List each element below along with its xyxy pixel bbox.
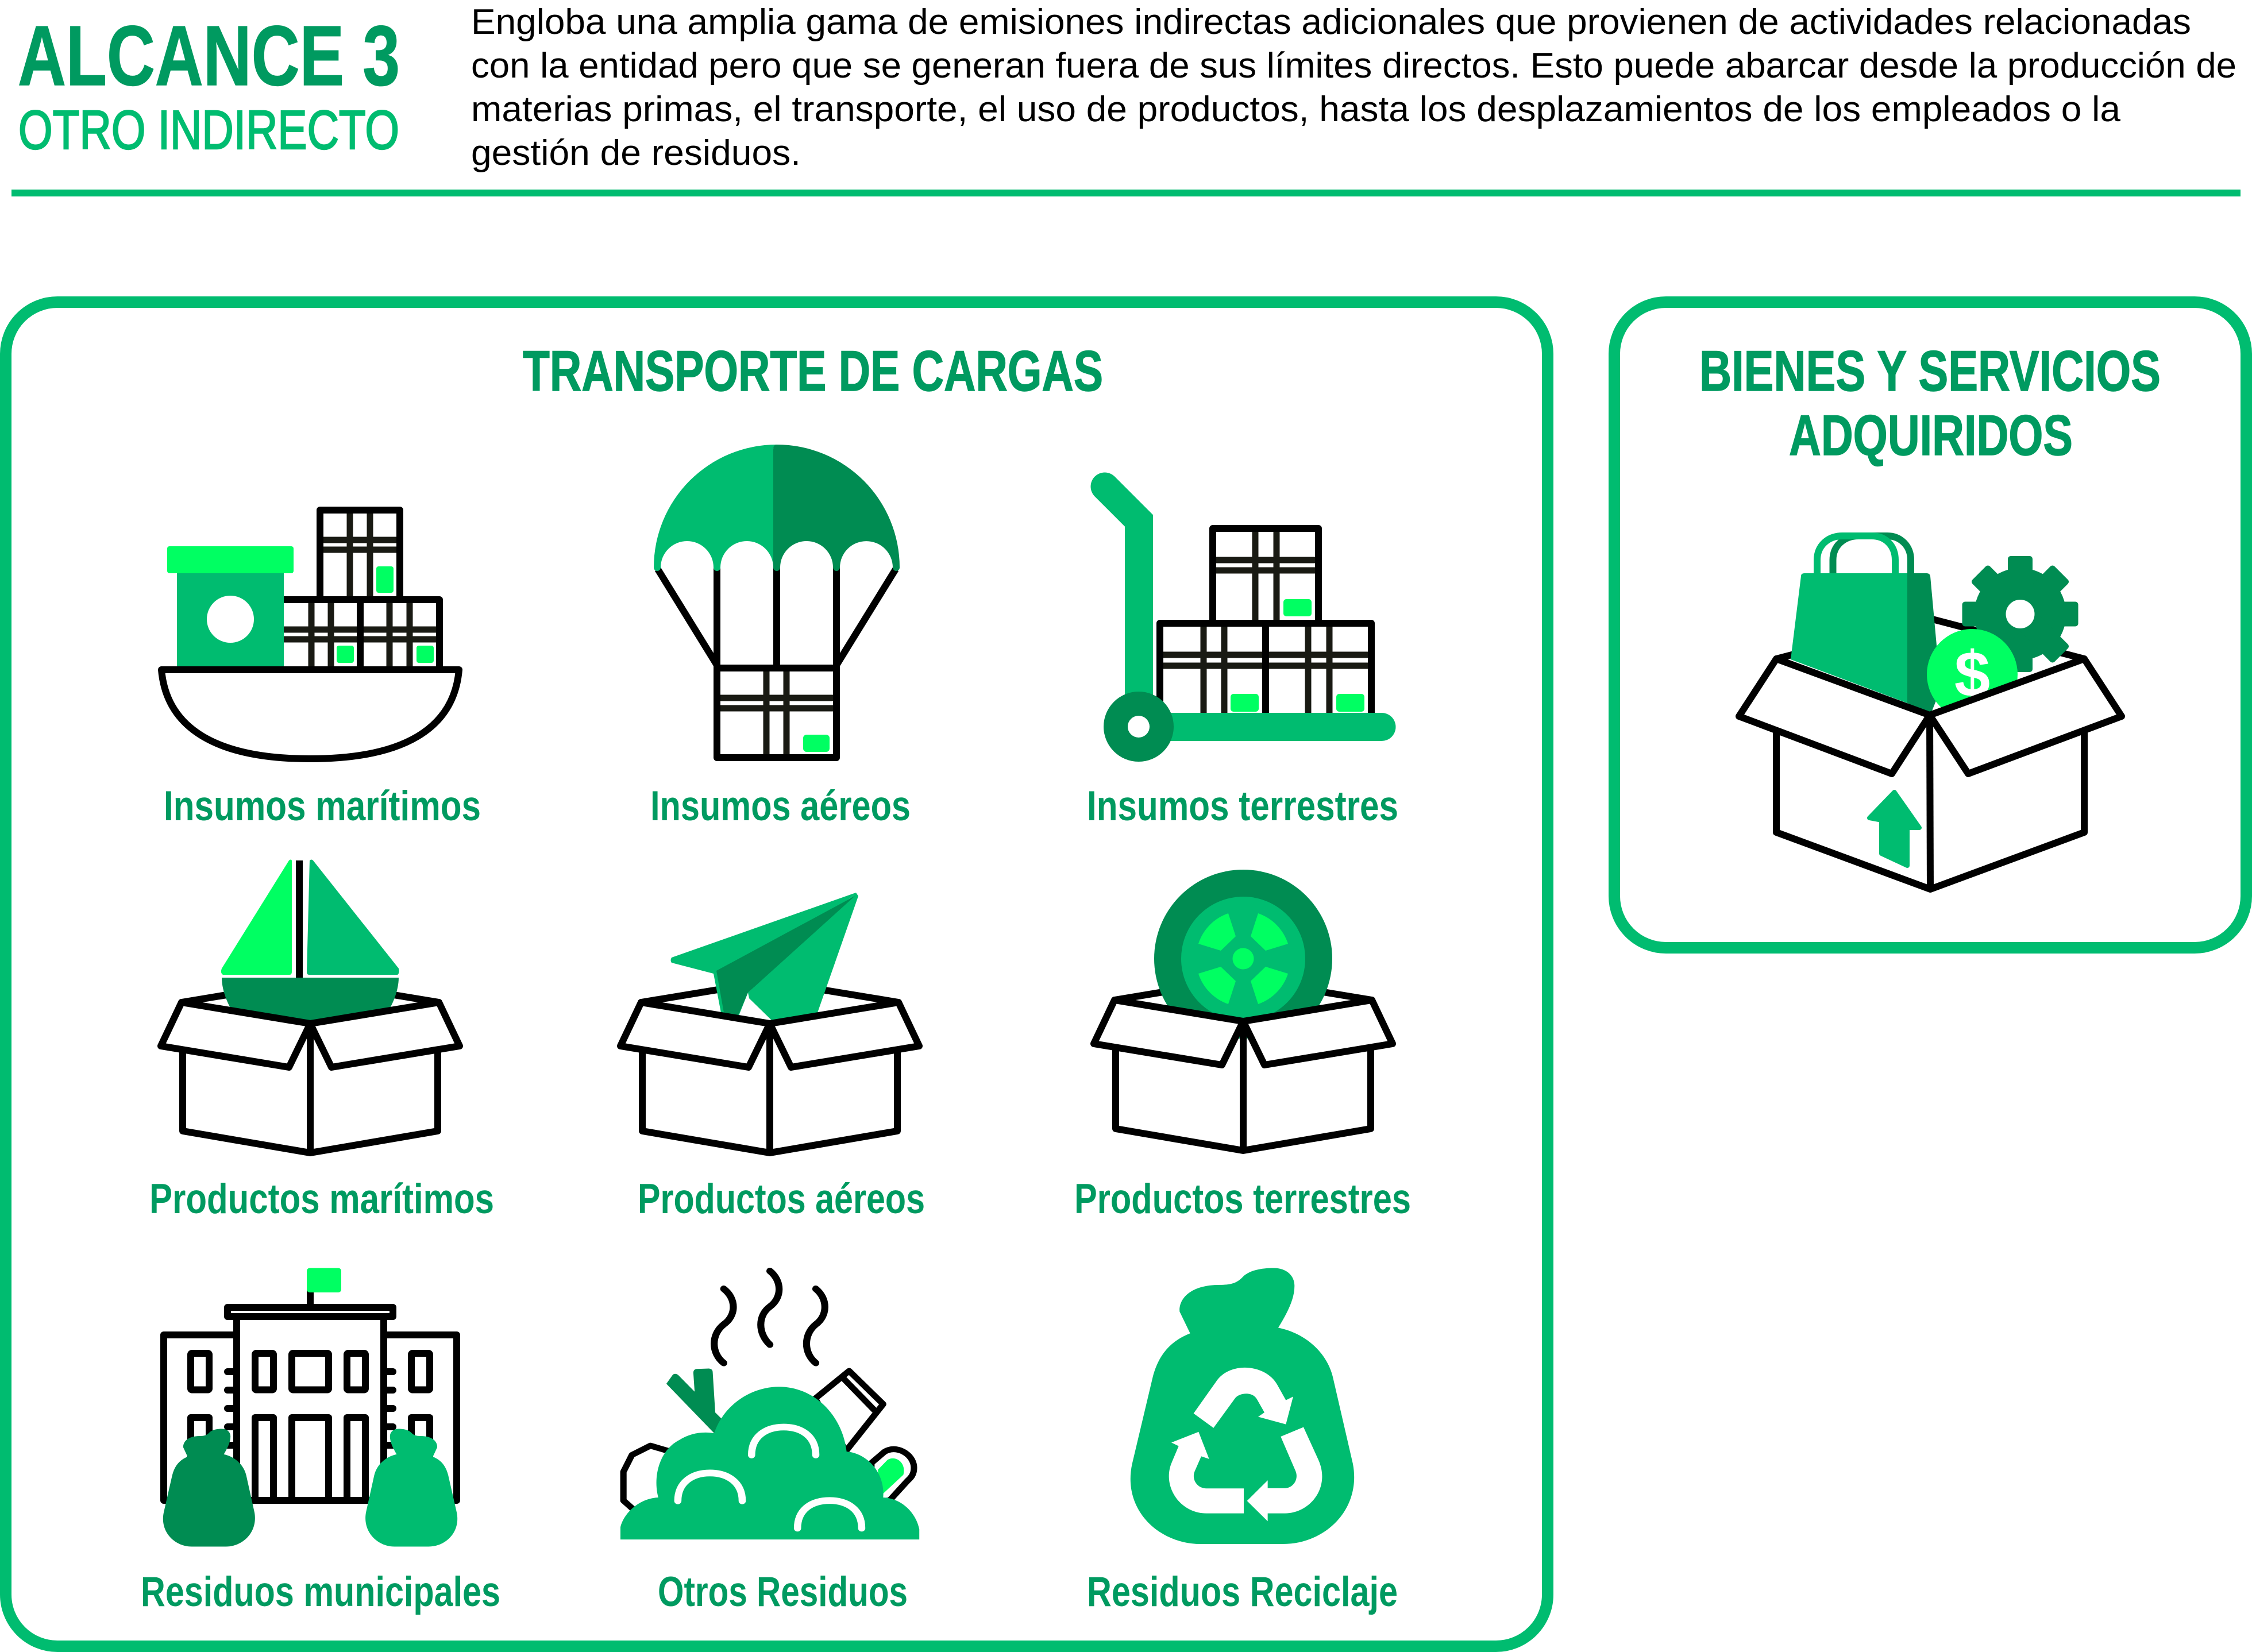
shopping bag [1791,573,1941,715]
gear [1962,556,2079,672]
label: insumos aereos: Insumos aéreos [650,783,911,829]
dollar sign: $ [1954,638,1990,710]
icon: box with paper plane [620,893,919,1153]
icon: hand truck with crates [1104,487,1382,762]
heading: bienes y servicios adquiridos [1699,339,2161,467]
heading: bienes y servicios adquiridos: ADQUIRIDOS [1789,403,2073,467]
intro text block: con la entidad pero que se generan fuera de sus límites directos. Esto puede abarcar desde la producción de [471,46,2236,86]
title: alcance 3: ALCANCE 3 [18,9,400,103]
icon: open box with bag, gear and coin [1739,536,2122,889]
subtitle: otro indirecto: OTRO INDIRECTO [18,99,399,161]
label: productos aereos: Productos aéreos [638,1176,925,1222]
label: insumos maritimos: Insumos marítimos [164,783,481,829]
icon: municipal building with trash bags [163,1268,457,1547]
icon: waste heap with steam [620,1271,919,1539]
label: productos terrestres: Productos terrestres [1074,1176,1411,1222]
icon: box with sailboat [161,859,460,1153]
icon: ship with crates [161,510,459,759]
label: residuos reciclaje: Residuos Reciclaje [1087,1569,1398,1615]
heading: transporte de cargas: TRANSPORTE DE CARGAS [523,339,1103,403]
icon: box with tire [1094,870,1393,1151]
intro text block [471,2,2236,173]
panel: bienes y servicios adquiridos [1614,302,2246,948]
arrow up [1869,792,1919,866]
intro text block: Engloba una amplia gama de emisiones indirectas adicionales que provienen de actividades relacionadas [471,2,2191,42]
label: otros residuos: Otros Residuos [658,1569,908,1615]
label: residuos municipales: Residuos municipales [141,1569,500,1615]
icon: recycling bag [1131,1268,1354,1544]
label: insumos terrestres: Insumos terrestres [1087,783,1398,829]
intro text block: gestión de residuos. [471,133,801,173]
label: productos maritimos: Productos marítimos [149,1176,494,1222]
panel: transporte de cargas [6,302,1548,1646]
intro text block: materias primas, el transporte, el uso de productos, hasta los desplazamientos de los empleados o la [471,90,2121,129]
icon: parachute with crate [654,445,900,758]
